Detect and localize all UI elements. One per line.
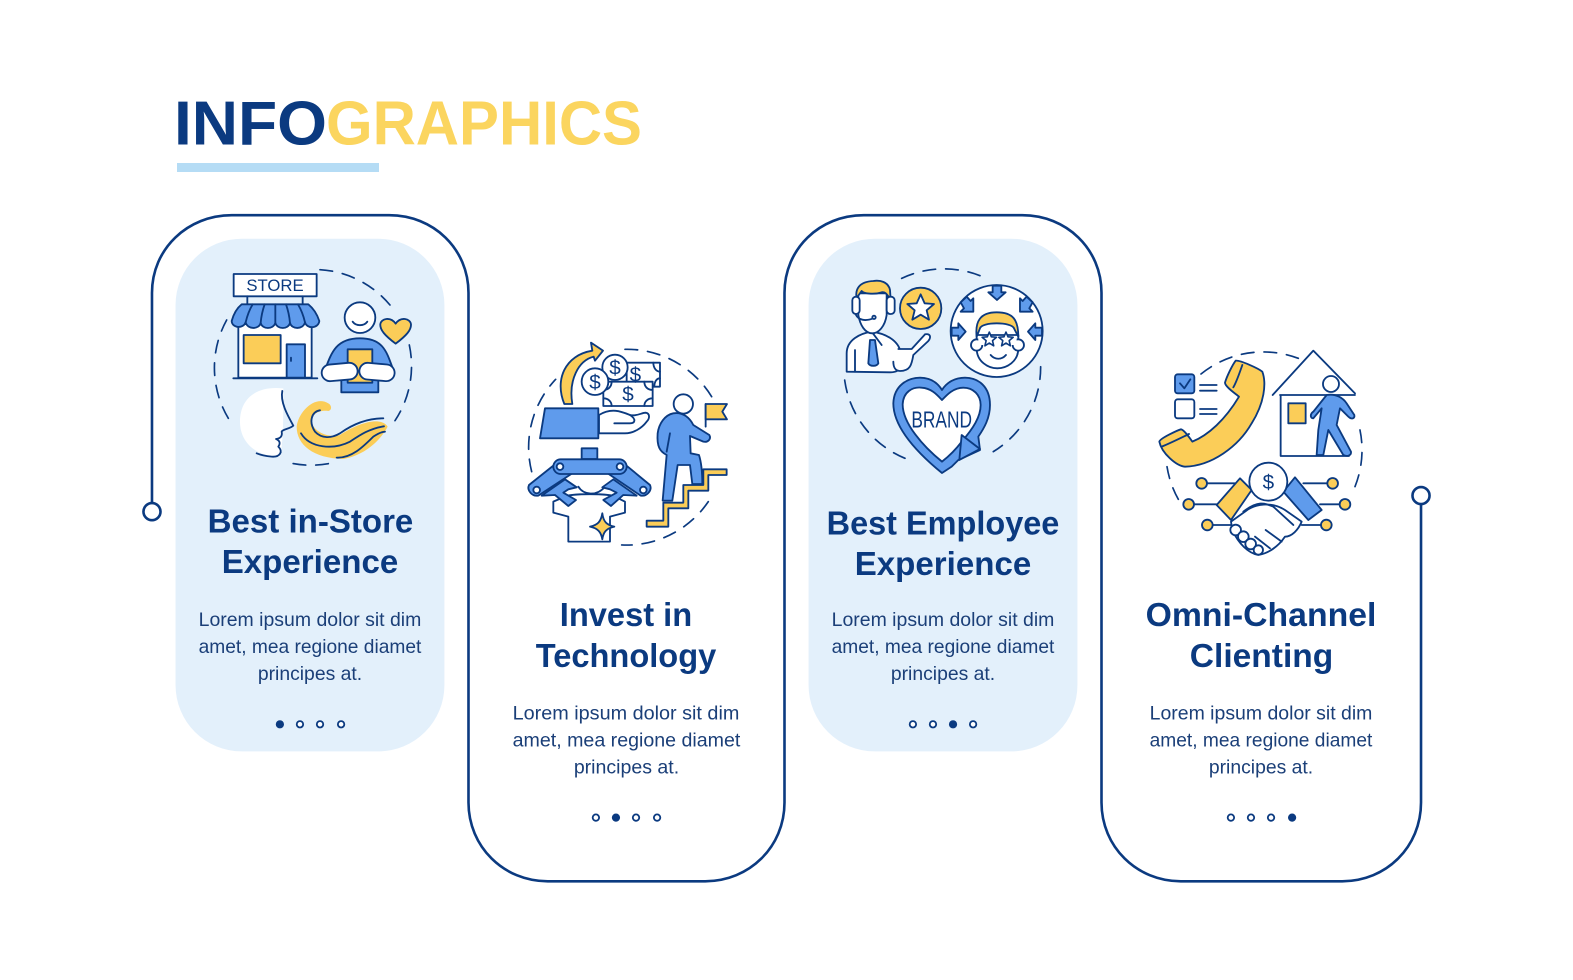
continuous outline connecting cards bbox=[143, 215, 1430, 881]
page dots bbox=[277, 721, 344, 728]
icon: investment, robot arm and climbing figure: $ bbox=[630, 363, 642, 386]
body text: principes at. bbox=[1209, 756, 1313, 778]
heading bbox=[536, 597, 717, 675]
body text: Lorem ipsum dolor sit dim bbox=[1150, 702, 1372, 724]
body text: amet, mea regione diamet bbox=[513, 729, 741, 751]
panel: Omni-Channel Clienting bbox=[1146, 351, 1376, 821]
heading bbox=[1146, 597, 1376, 675]
body text: Lorem ipsum dolor sit dim bbox=[199, 609, 421, 631]
panel: Invest in Technology bbox=[513, 343, 741, 821]
body text: amet, mea regione diamet bbox=[1150, 729, 1373, 751]
icon: store, customer and scent bbox=[214, 270, 412, 465]
body text bbox=[1150, 702, 1373, 778]
page dots bbox=[1228, 814, 1295, 821]
heading bbox=[827, 506, 1059, 583]
body text bbox=[199, 609, 422, 685]
panel background: card 3 bbox=[809, 239, 1077, 751]
icon: employee, star rating and brand heart: BRAND bbox=[911, 406, 972, 432]
icon: store, customer and scent: STORE bbox=[246, 276, 304, 295]
panel background: card 1 bbox=[176, 239, 444, 751]
body text bbox=[513, 702, 741, 778]
heading: Best Employee bbox=[827, 506, 1059, 543]
heading: Technology bbox=[536, 638, 717, 675]
title: GRAPHICS bbox=[326, 90, 642, 158]
heading: Experience bbox=[222, 544, 398, 581]
icon: investment, robot arm and climbing figure: $ bbox=[609, 357, 621, 380]
body text: amet, mea regione diamet bbox=[832, 636, 1055, 658]
title bbox=[174, 90, 642, 172]
heading: Clienting bbox=[1190, 638, 1333, 675]
heading bbox=[208, 504, 413, 581]
panel: Best in-Store Experience bbox=[199, 270, 422, 728]
icon: phone, house and handshake bbox=[1159, 351, 1362, 555]
body text: Lorem ipsum dolor sit dim bbox=[513, 702, 739, 724]
icon: phone, house and handshake: $ bbox=[1263, 471, 1275, 494]
body text: amet, mea regione diamet bbox=[199, 636, 422, 658]
heading: Experience bbox=[855, 546, 1031, 583]
icon: investment, robot arm and climbing figure: $ bbox=[589, 371, 601, 394]
page dots bbox=[910, 721, 976, 728]
page dots bbox=[593, 814, 660, 821]
body text: Lorem ipsum dolor sit dim bbox=[832, 609, 1054, 631]
icon: investment, robot arm and climbing figure bbox=[528, 343, 727, 545]
heading: Best in-Store bbox=[208, 504, 413, 541]
icon: investment, robot arm and climbing figure: $ bbox=[622, 383, 634, 406]
body text bbox=[832, 609, 1055, 685]
title: INFO bbox=[174, 90, 327, 158]
panel: Best Employee Experience bbox=[827, 269, 1059, 728]
heading: Invest in bbox=[560, 597, 692, 634]
body text: principes at. bbox=[574, 756, 679, 778]
icon: employee, star rating and brand heart bbox=[845, 269, 1043, 473]
body text: principes at. bbox=[891, 663, 995, 685]
body text: principes at. bbox=[258, 663, 362, 685]
heading: Omni-Channel bbox=[1146, 597, 1376, 634]
